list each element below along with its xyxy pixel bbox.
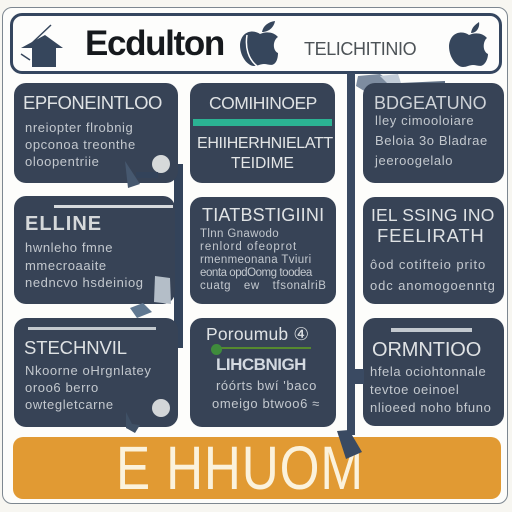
body text: ôod cotifteio prito [370, 257, 486, 272]
title: Ecdulton [85, 24, 224, 63]
body text: Beloia 3o Bladrae [375, 133, 488, 148]
body text [25, 363, 151, 412]
heading line 1: IEL SSING INO [371, 205, 495, 225]
body text [374, 113, 488, 168]
top rule [54, 205, 173, 208]
body text: Tlnn Gnawodo [200, 228, 279, 240]
heading: COMIHINOEP [209, 93, 317, 113]
heading: ORMNTIOO [372, 339, 481, 361]
connector: center vertical [174, 164, 183, 348]
body text: eonta opdOomg toodea [200, 267, 312, 279]
icon: house [20, 24, 63, 67]
card: middle center [190, 197, 336, 304]
body text: renlord ofeoprot [200, 241, 297, 253]
top rule [28, 327, 156, 330]
heading: EPFONEINTLOO [23, 92, 162, 113]
card: bottom right [363, 318, 504, 426]
body text [25, 120, 136, 169]
badge [152, 399, 170, 417]
card: bottom left [14, 318, 178, 427]
card: top right [363, 83, 504, 183]
arrow head on banner [337, 430, 362, 459]
subheading: EHIIHERHNIELATT [197, 135, 333, 152]
body text [200, 228, 327, 292]
body text [370, 257, 496, 293]
body text [212, 378, 320, 411]
body text: odc anomogoenntg [370, 278, 496, 293]
subheading: LIHCBNIGH [216, 355, 306, 374]
card: bottom center [190, 318, 336, 427]
heading: ELLINE [25, 213, 102, 235]
connector: horizontal stub [353, 369, 364, 384]
body text: rmenmeonana Tviuri [200, 254, 312, 266]
body text: jeeroogelalo [375, 153, 453, 168]
green rule [216, 347, 311, 349]
body text: nlioeed noho bfuno [370, 400, 491, 415]
body text: opconoa treonthe [25, 137, 136, 152]
badge [152, 155, 170, 173]
body text: hwnleho fmne [25, 240, 113, 255]
connector: arrow top center [125, 162, 158, 188]
heading line 2: FEELIRATH [377, 225, 485, 246]
heading: STECHNVIL [24, 337, 127, 358]
heading: Poroumub ④ [206, 324, 309, 344]
body text: cuatg ew tfsonalriB [200, 280, 327, 292]
body text: nedncvo hsdeiniog [25, 275, 144, 290]
card: top center [190, 83, 335, 183]
card: top left [14, 83, 178, 183]
body text: Nkoorne oHrgnlatey [25, 363, 151, 378]
connector: right vertical [347, 73, 355, 435]
body text: oroo6 berro [25, 380, 99, 395]
subheading line 2: TEIDIME [231, 155, 294, 172]
heading: BDGEATUNO [374, 93, 487, 113]
icon: apple left [240, 21, 278, 66]
header bar [10, 13, 502, 74]
body text: omeigo btwoo6 ≈ [212, 396, 320, 411]
body text: mmecroaaite [25, 258, 107, 272]
connector: top fragments [356, 74, 446, 91]
body text: oloopentriie [25, 154, 99, 169]
body text: róórts bwí 'baco [216, 378, 317, 393]
body text [370, 364, 491, 415]
heading: TIATBSTIGIINI [202, 205, 324, 225]
body text: owtegletcarne [25, 397, 114, 412]
banner text: E HHUOM [116, 434, 364, 502]
arrow bottom left [126, 412, 140, 433]
orange banner [13, 437, 501, 499]
icon: apple right [449, 22, 488, 67]
subtitle: TELICHITINIO [304, 39, 416, 59]
body text: nreiopter flrobnig [25, 120, 133, 135]
body text: hfela ociohtonnale [370, 364, 486, 379]
body text: lley cimooloiare [375, 113, 474, 128]
green dot [211, 344, 222, 355]
folded note icon [130, 276, 171, 318]
green bar [193, 119, 332, 126]
top rule [391, 328, 472, 332]
card: middle right [363, 197, 504, 304]
body text [25, 240, 144, 290]
body text: tevtoe oeinoel [370, 382, 459, 397]
card: middle left [14, 196, 175, 304]
